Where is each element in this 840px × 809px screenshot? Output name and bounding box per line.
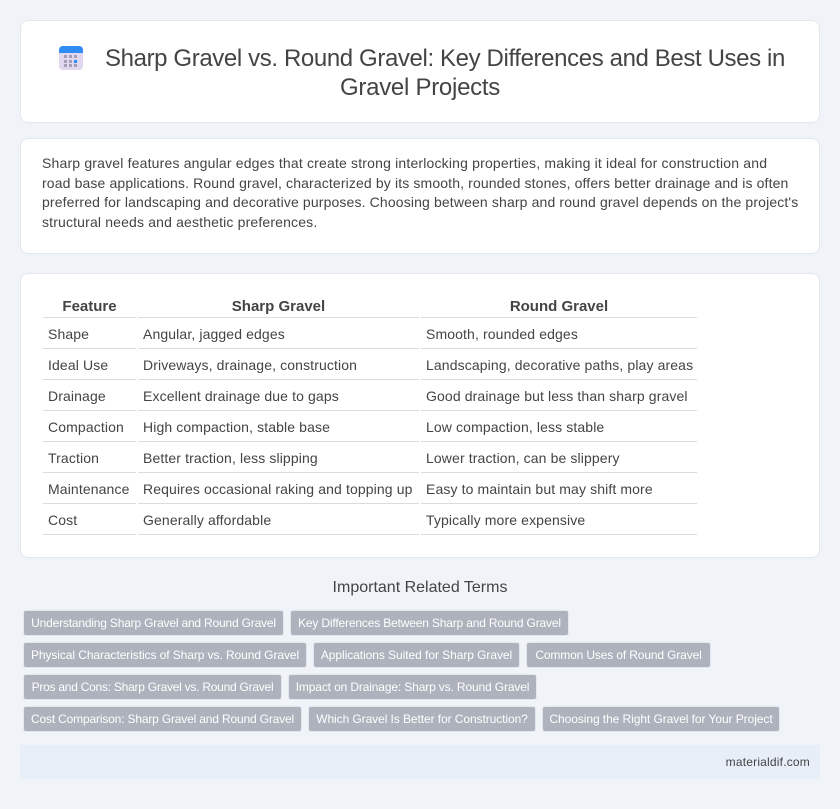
comparison table: Excellent drainage due to gaps xyxy=(143,388,339,404)
comparison table: High compaction, stable base xyxy=(143,419,330,435)
comparison table: Better traction, less slipping xyxy=(143,450,318,466)
comparison table: Traction xyxy=(48,450,99,466)
related term tags: Pros and Cons: Sharp Gravel vs. Round Gravel xyxy=(32,680,273,694)
title: Gravel Projects xyxy=(340,74,500,101)
panel: introduction xyxy=(20,138,820,254)
related term tags: Impact on Drainage: Sharp vs. Round Gravel xyxy=(296,680,529,694)
comparison table: Sharp Gravel xyxy=(232,298,325,315)
related term tags: Which Gravel Is Better for Construction? xyxy=(316,712,528,726)
comparison table: Feature xyxy=(62,298,117,315)
title xyxy=(105,45,785,101)
title: Sharp Gravel vs. Round Gravel: Key Differences and Best Uses in xyxy=(105,45,785,72)
comparison table: Low compaction, less stable xyxy=(426,419,604,435)
comparison table: Smooth, rounded edges xyxy=(426,326,578,342)
comparison table: Drainage xyxy=(48,388,106,404)
comparison table: Cost xyxy=(48,512,77,528)
comparison table: Landscaping, decorative paths, play areas xyxy=(426,357,693,373)
comparison table: Round Gravel xyxy=(510,298,608,315)
related term tags: Key Differences Between Sharp and Round Gravel xyxy=(298,616,561,630)
footer source: materialdif.com xyxy=(726,755,810,769)
comparison table: Ideal Use xyxy=(48,357,108,373)
intro paragraph: structural needs and aesthetic preferences. xyxy=(42,214,317,230)
heading: related terms: Important Related Terms xyxy=(333,579,507,596)
comparison table: Shape xyxy=(48,326,89,342)
comparison table: Driveways, drainage, construction xyxy=(143,357,357,373)
comparison table: Maintenance xyxy=(48,481,130,497)
comparison table: Easy to maintain but may shift more xyxy=(426,481,653,497)
comparison table: Good drainage but less than sharp gravel xyxy=(426,388,688,404)
intro paragraph xyxy=(42,155,798,230)
icon: calendar xyxy=(59,46,83,70)
intro paragraph: road base applications. Round gravel, characterized by its smooth, rounded stones, offers better drainage and is often xyxy=(42,175,788,191)
comparison table xyxy=(43,298,697,535)
comparison table: Generally affordable xyxy=(143,512,271,528)
intro paragraph: preferred for landscaping and decorative purposes. Choosing between sharp and round gravel depends on the project's xyxy=(42,194,798,210)
related term tags: Applications Suited for Sharp Gravel xyxy=(321,648,512,662)
comparison table: Typically more expensive xyxy=(426,512,585,528)
related term tags: Common Uses of Round Gravel xyxy=(535,648,702,662)
footer xyxy=(20,745,820,779)
intro paragraph: Sharp gravel features angular edges that create strong interlocking properties, making it ideal for construction and xyxy=(42,155,767,171)
panel: comparison table xyxy=(20,273,820,558)
panel: title header xyxy=(20,20,820,123)
related term tags: Choosing the Right Gravel for Your Project xyxy=(549,712,773,726)
related term tags: Physical Characteristics of Sharp vs. Round Gravel xyxy=(31,648,299,662)
comparison table: Compaction xyxy=(48,419,124,435)
comparison table: Requires occasional raking and topping up xyxy=(143,481,413,497)
comparison table: Lower traction, can be slippery xyxy=(426,450,620,466)
related term tags xyxy=(23,610,780,732)
related term tags: Understanding Sharp Gravel and Round Gravel xyxy=(31,616,276,630)
related term tags: Cost Comparison: Sharp Gravel and Round Gravel xyxy=(31,712,294,726)
comparison table: Angular, jagged edges xyxy=(143,326,285,342)
